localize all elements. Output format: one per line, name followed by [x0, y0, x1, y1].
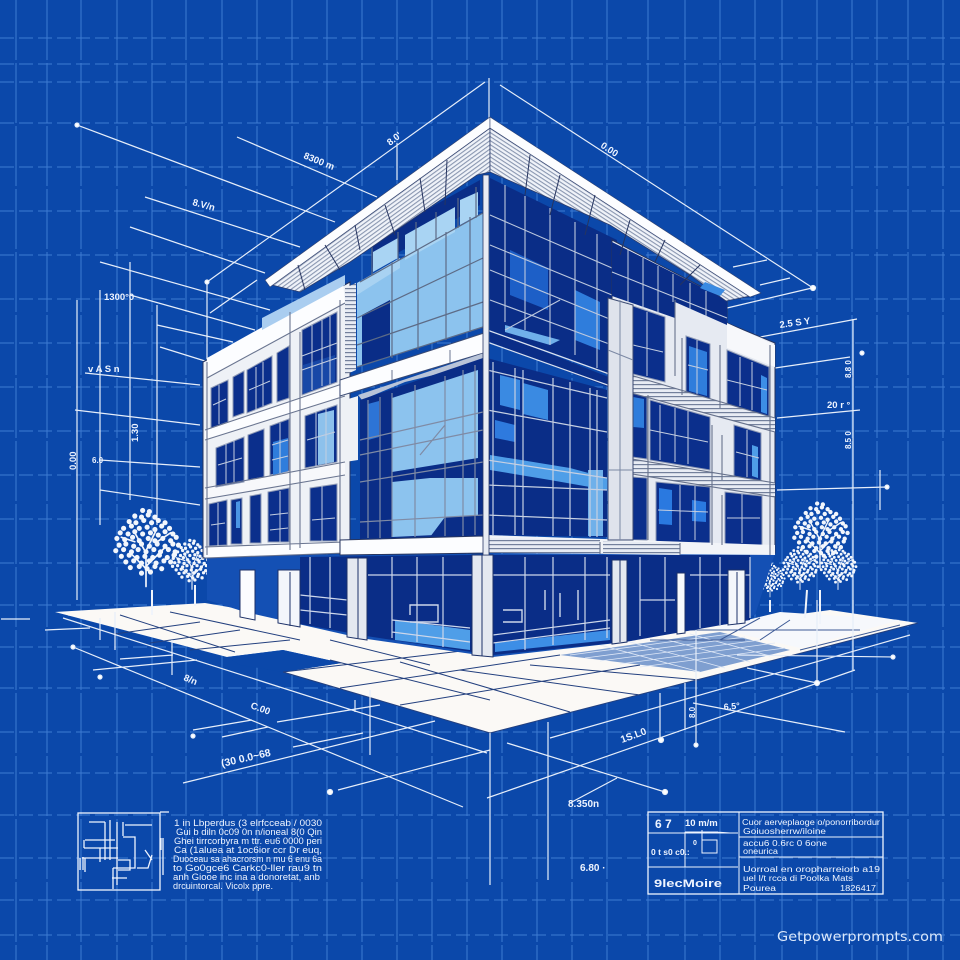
paving grid near right entrance [560, 632, 790, 672]
title block right text: Goiuosherrw/iloine [743, 827, 827, 836]
dimension labels: 8.8 0 [844, 360, 853, 378]
trees right [756, 504, 856, 624]
title block right text: Cuor aerveplaoge o/ponorribordur [742, 818, 880, 827]
right terraces [715, 612, 900, 648]
title block right text: Pourea [743, 884, 777, 893]
dimension labels: 8.0' [385, 130, 404, 148]
title block right text: accu6 0.6rc 0 6one [743, 839, 828, 848]
lower glass left [360, 358, 483, 539]
title block right text: 1826417 [840, 884, 877, 893]
upper glass right [487, 178, 617, 390]
description text: Duoceau sa ahacrorsm n mu 6 enu 6a [173, 854, 322, 864]
watermark: Getpowerprompts.com [777, 930, 943, 945]
site plan drawing [78, 812, 169, 890]
title block left labels: 0 t s0 c0.: [651, 847, 690, 857]
dimension labels: v A S n [88, 364, 120, 375]
title block left labels: 10 m/m [685, 818, 718, 829]
dimension labels: C.00 [249, 700, 272, 718]
dimension labels: 0.00 [598, 140, 620, 160]
dimension labels: 6.80 · [580, 863, 606, 874]
dimension lines: top and right [397, 78, 889, 630]
title block left labels: 6 7 [655, 817, 672, 831]
plaza [55, 603, 918, 733]
trees left [116, 510, 213, 615]
corner post [483, 175, 489, 555]
paving joints [115, 612, 918, 733]
title block right text: uel l/t rcca di Poolka Mats [743, 874, 853, 883]
lower glass right [487, 358, 607, 537]
right wing bands [727, 323, 775, 367]
dimension labels: 8.V/n [191, 197, 216, 214]
dimension labels: 20 r ° [827, 400, 851, 411]
description text: 1 in Lbperdus (3 elrfcceab / 0030 [174, 818, 322, 828]
title block left labels: 9lecMoire [654, 878, 722, 890]
upper glass left [340, 180, 487, 400]
dimension labels: 8.350n [568, 799, 599, 810]
description text: anh Giooe inc ina a donoretat, anb [173, 872, 320, 882]
title block right text [742, 818, 881, 893]
title block left labels: 0 [693, 840, 697, 847]
description text [173, 818, 322, 891]
dimension lines: bottom left [1, 612, 490, 807]
dimension labels: (30 0.0~68 [220, 747, 272, 770]
plaza cut-out [227, 650, 342, 672]
title block right text: oneurica [743, 847, 779, 856]
dimension labels: 8.5 0 [844, 431, 853, 449]
dimension lines: upper left [68, 82, 485, 615]
dimension labels: 1300°0 [104, 292, 134, 303]
dimension labels: 1.30 [130, 424, 141, 442]
dimension labels [68, 130, 853, 874]
top floor strip [612, 242, 727, 325]
left wing windows [209, 312, 337, 546]
dimension labels: 2.5 S Y [779, 316, 812, 331]
description text: Gui b diln 0c09 0n n/ioneal 8(0 Qin [176, 827, 322, 837]
description text: Ca (1aluea at 1oc6ior ccr Dr euq, [174, 845, 322, 855]
description text: Ghei tirrcorbyra m ttr. eu6 0000 peri [174, 836, 322, 846]
dimension labels: 0.00 [68, 452, 79, 470]
roof [265, 117, 761, 301]
lower band left [340, 536, 487, 555]
title block right text: Uorroal en oropharreiorb a19 [743, 865, 881, 874]
white pier at corner [608, 298, 633, 540]
description text: drcuintorcal. Vicolx ppre. [173, 881, 273, 891]
description text: to Go0gce6 Carkc0-ller rau9 tn [173, 863, 322, 873]
dimension labels: 1S.L0 [619, 726, 649, 746]
dimension labels: 6.0 [92, 456, 104, 465]
right wing [487, 240, 775, 555]
left wing [203, 275, 358, 558]
dimension labels: 8.0 [688, 706, 697, 718]
title block left labels [651, 817, 722, 890]
ground floor [207, 553, 775, 657]
dimension labels: 8300 m [302, 151, 336, 173]
dimension lines: bottom right [487, 600, 910, 885]
dimension labels: 8/n [182, 673, 199, 688]
title block [648, 812, 883, 894]
building [203, 117, 775, 657]
dimension labels: 6.5° [723, 701, 741, 712]
columns [240, 555, 745, 657]
